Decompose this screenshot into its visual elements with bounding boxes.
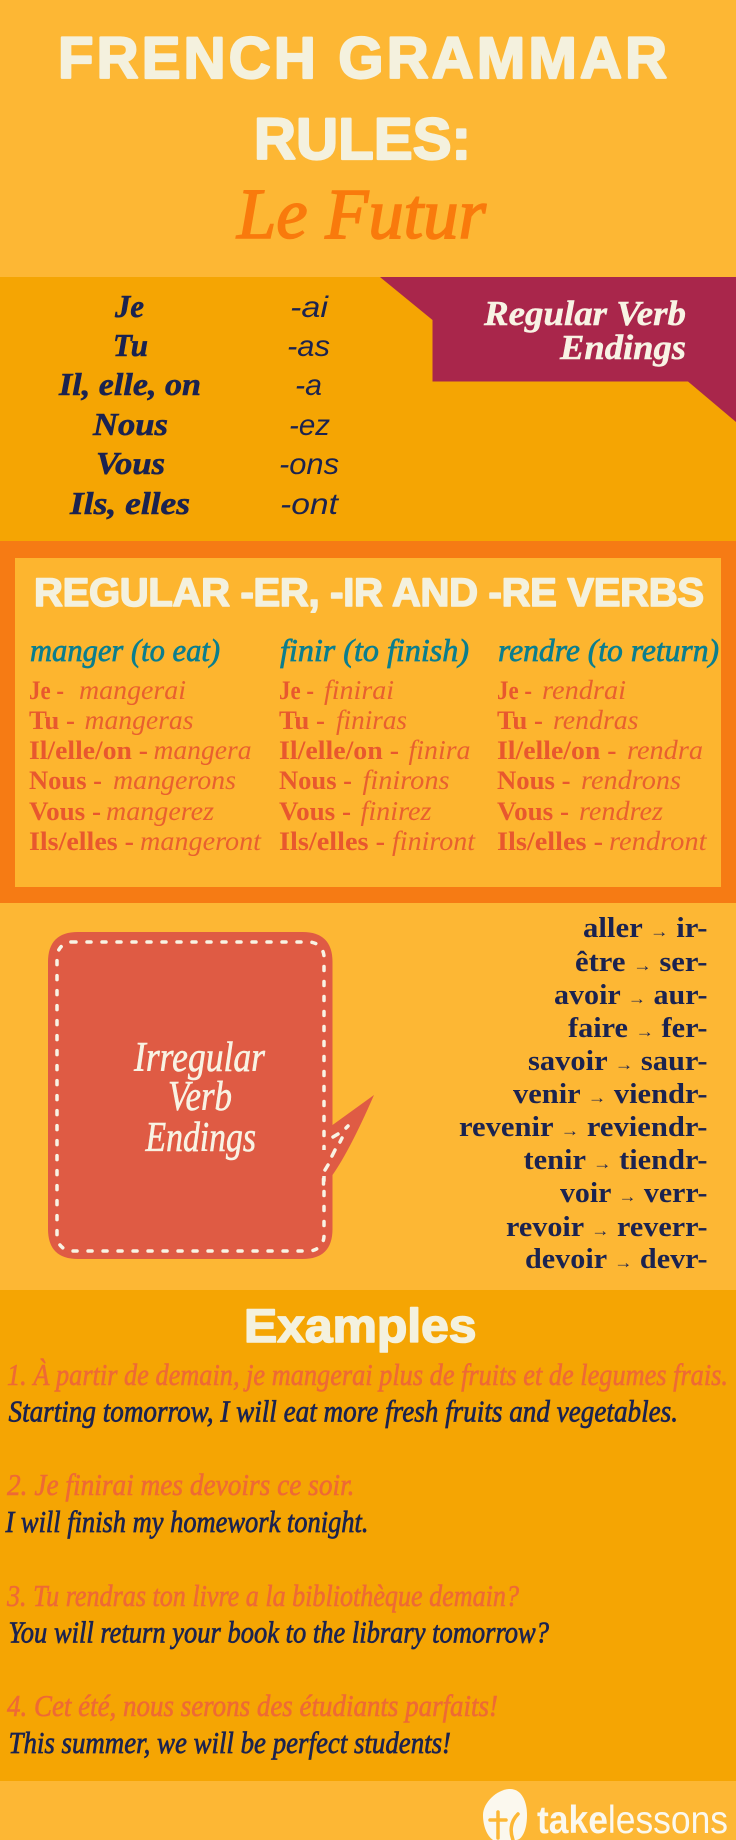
panel: regular verb endings xyxy=(0,277,736,541)
column: rendre: rendrai xyxy=(542,675,626,705)
pronoun list: Il, elle, on xyxy=(58,366,201,402)
panel: examples xyxy=(0,1290,736,1781)
endings list: -ez xyxy=(289,409,330,442)
example 1 xyxy=(7,1357,728,1428)
column: rendre: Ils/elles - xyxy=(497,827,603,856)
column: finir xyxy=(279,632,477,856)
column: manger: mangeras xyxy=(84,705,194,735)
column: finir: finiront xyxy=(392,826,477,856)
irregular verb stems list: aller → ir- xyxy=(583,913,708,944)
column: manger: manger (to eat) xyxy=(30,632,220,668)
heading: examples: Examples xyxy=(244,1299,476,1352)
footer band xyxy=(0,1781,736,1840)
ribbon: regular verb endings: Endings xyxy=(559,328,686,367)
example 4 xyxy=(7,1688,498,1760)
panel: irregular verb endings xyxy=(0,903,736,1290)
bubble label xyxy=(133,1035,266,1161)
subtitle: Le Futur: Le Futur xyxy=(236,174,487,254)
column: finir: Je - xyxy=(279,676,314,705)
bubble label: Endings xyxy=(145,1115,256,1161)
column: rendre: rendras xyxy=(553,705,638,735)
irregular verb stems list: être → ser- xyxy=(575,947,708,978)
column: rendre: rendrez xyxy=(579,796,663,826)
example 2 xyxy=(5,1467,368,1539)
example 4: This summer, we will be perfect students! xyxy=(8,1725,451,1760)
column: manger: Je - xyxy=(29,676,64,705)
title: French Grammar Rules: RULES: xyxy=(254,107,471,172)
column: finir: Tu - xyxy=(279,706,325,735)
column: finir: finirons xyxy=(362,765,450,795)
endings list: -as xyxy=(287,330,330,363)
irregular verb stems list: revenir → reviendr- xyxy=(459,1112,708,1143)
column: finir: finirez xyxy=(360,796,432,826)
irregular verb stems list: devoir → devr- xyxy=(525,1244,708,1275)
column: manger: mangera xyxy=(154,735,252,765)
irregular verb stems list: faire → fer- xyxy=(568,1013,708,1044)
column: rendre xyxy=(497,632,719,856)
irregular verb stems list: venir → viendr- xyxy=(513,1079,708,1110)
column: rendre: rendra xyxy=(627,735,703,765)
example 3: 3. Tu rendras ton livre a la bibliothèque demain? xyxy=(6,1578,519,1613)
column: manger: mangerez xyxy=(106,796,215,826)
irregular verb stems list: savoir → saur- xyxy=(528,1046,708,1077)
endings list: -ons xyxy=(279,448,339,481)
pronoun list: Je xyxy=(114,288,144,324)
irregular verb stems list xyxy=(459,913,708,1275)
bubble label: Irregular xyxy=(133,1035,266,1081)
example 3: You will return your book to the library tomorrow? xyxy=(8,1614,549,1650)
example 2: I will finish my homework tonight. xyxy=(5,1504,368,1539)
speech bubble xyxy=(48,932,374,1259)
title band xyxy=(0,0,736,277)
column: rendre: rendre (to return) xyxy=(498,632,719,668)
column: finir: finira xyxy=(408,735,470,765)
endings list xyxy=(279,291,340,521)
title: French Grammar Rules xyxy=(58,26,667,172)
pronoun list: Nous xyxy=(92,406,168,442)
panel: regular -er, -ir and -re verbs xyxy=(0,541,736,903)
column: rendre: Il/elle/on - xyxy=(497,736,616,765)
ribbon: regular verb endings: Regular Verb xyxy=(483,294,686,333)
endings list: -ai xyxy=(290,291,330,324)
column: manger: mangeront xyxy=(140,826,263,856)
irregular verb stems list: revoir → reverr- xyxy=(506,1212,708,1243)
column: manger: Vous - xyxy=(29,797,101,826)
example 2: 2. Je finirai mes devoirs ce soir. xyxy=(7,1467,354,1502)
title: French Grammar Rules: FRENCH GRAMMAR xyxy=(58,26,667,91)
logo: takelessons xyxy=(483,1789,728,1840)
column: rendre: rendrons xyxy=(581,765,681,795)
irregular verb stems list: voir → verr- xyxy=(560,1178,708,1209)
heading: regular verbs: REGULAR -ER, -IR AND -RE VERBS xyxy=(34,571,704,615)
column: manger: Ils/elles - xyxy=(29,827,134,856)
column: manger: Nous - xyxy=(29,766,102,795)
pronoun list xyxy=(58,288,201,521)
endings list: -ont xyxy=(280,488,340,521)
column: rendre: rendront xyxy=(609,826,708,856)
column: rendre: Vous - xyxy=(497,797,569,826)
column: rendre: Tu - xyxy=(497,706,543,735)
column: manger: mangerai xyxy=(79,675,186,705)
irregular verb stems list: avoir → aur- xyxy=(554,980,708,1011)
column: manger: Tu - xyxy=(29,706,75,735)
column: finir: Vous - xyxy=(279,797,351,826)
column: finir: finirai xyxy=(324,675,394,705)
pronoun list: Ils, elles xyxy=(69,485,190,521)
column: manger xyxy=(29,632,263,856)
column: finir: finir (to finish) xyxy=(280,632,469,668)
irregular verb stems list: tenir → tiendr- xyxy=(524,1145,708,1176)
bubble label: Verb xyxy=(168,1074,232,1120)
column: manger: mangerons xyxy=(113,765,236,795)
column: rendre: Je - xyxy=(497,676,532,705)
column: rendre: Nous - xyxy=(497,766,570,795)
endings list: -a xyxy=(295,369,322,402)
column: finir: Ils/elles - xyxy=(279,827,385,856)
ribbon: regular verb endings xyxy=(380,277,736,422)
column: finir: Nous - xyxy=(279,766,352,795)
column: finir: finiras xyxy=(336,705,407,735)
example 3 xyxy=(6,1578,549,1650)
pronoun list: Tu xyxy=(113,327,148,363)
column: finir: Il/elle/on - xyxy=(279,736,399,765)
pronoun list: Vous xyxy=(96,445,165,481)
example 4: 4. Cet été, nous serons des étudiants parfaits! xyxy=(7,1688,498,1723)
column: manger: Il/elle/on - xyxy=(29,736,148,765)
